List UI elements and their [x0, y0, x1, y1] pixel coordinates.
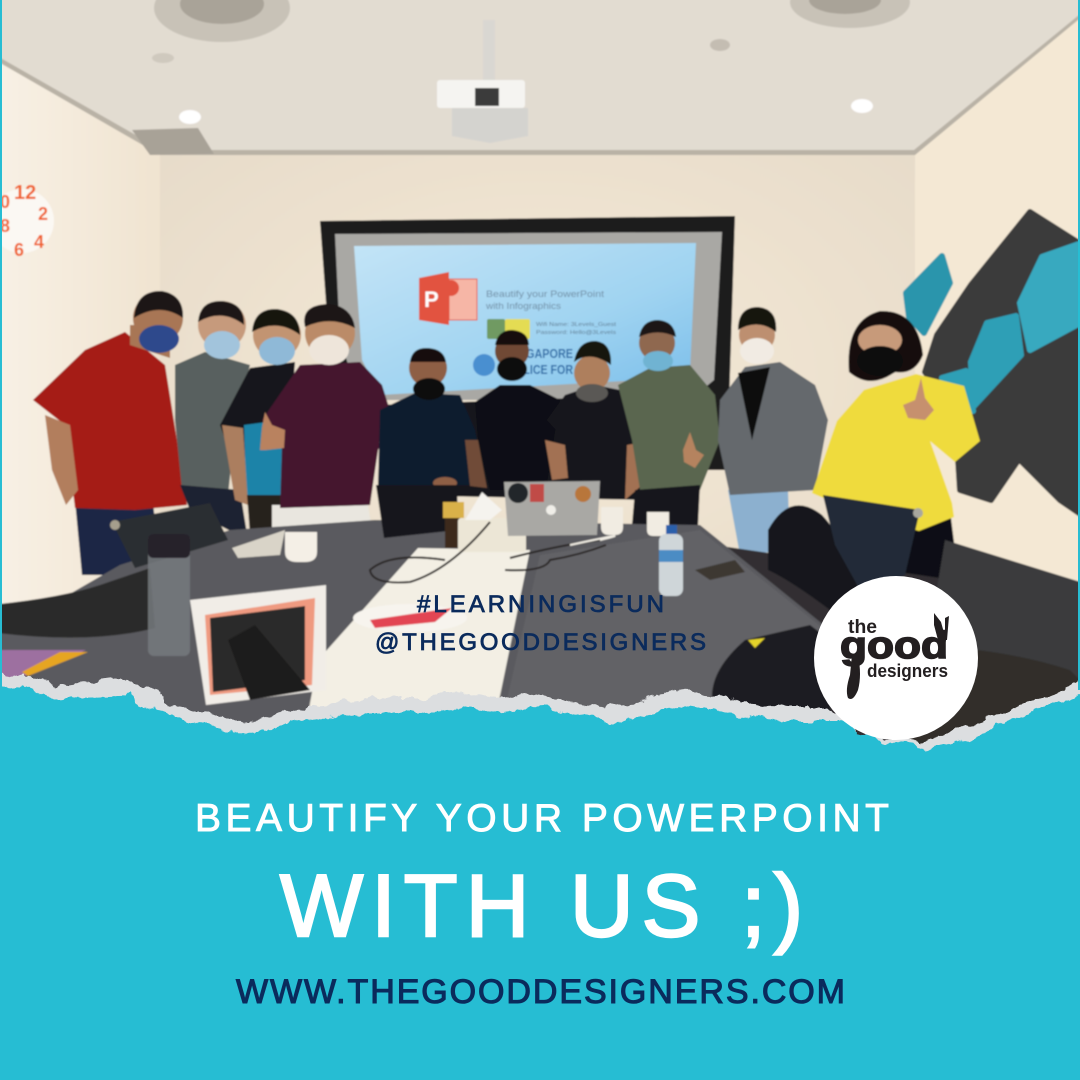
ceiling [0, 0, 1080, 160]
tissue box [458, 492, 526, 552]
left chair [110, 503, 228, 568]
logo badge: the good designers: the [848, 617, 877, 638]
phone pouch [695, 560, 745, 580]
backpack [768, 505, 860, 610]
bag at right front [900, 645, 1080, 760]
left wall [0, 57, 160, 660]
projection screen: Password: Hello@3Levels [536, 330, 616, 336]
person: black polo leaning [545, 341, 654, 500]
logo badge: the good designers: designers [867, 661, 948, 681]
wall clock: 8 [0, 216, 10, 236]
black laptop [376, 485, 458, 538]
projection screen: Wifi Name: 3Levels_Guest [536, 322, 617, 328]
person: navy shirt [378, 348, 483, 489]
navy chair [823, 495, 920, 590]
black bag at table front [712, 625, 830, 750]
right edge strip [1078, 0, 1080, 690]
person: grey hoodie [718, 307, 828, 555]
hashtag caption: #LEARNINGISFUN [417, 591, 664, 618]
back wall [160, 155, 915, 640]
photo frame back [190, 585, 326, 705]
wall clock: 12 [14, 182, 36, 204]
wall clock: 4 [34, 232, 44, 252]
cables on table [370, 522, 615, 582]
plastic bottle [659, 525, 683, 596]
heading line one: BEAUTIFY YOUR POWERPOINT [195, 797, 889, 840]
heading line two: WITH US ;) [280, 856, 803, 955]
person: olive shirt [618, 320, 720, 525]
projection screen [320, 216, 735, 470]
wall clock [0, 182, 54, 260]
pencil holder [443, 502, 464, 548]
handle caption: @THEGOODDESIGNERS [375, 629, 706, 656]
person: red shirt [33, 291, 187, 575]
projection screen: POLICE FOR [508, 362, 573, 377]
PowerPoint logo on slide [419, 272, 477, 325]
wall clock: 0 [0, 192, 10, 212]
left laptop and white cup [232, 530, 317, 562]
clear water bottle [148, 534, 190, 656]
projector [437, 20, 528, 143]
logo badge: the good designers [814, 576, 978, 740]
wall clock: 2 [38, 204, 48, 224]
mugs [601, 507, 669, 536]
conference table [0, 520, 830, 730]
person: black t-shirt [465, 330, 560, 490]
projection screen: with Infographics [485, 301, 561, 312]
projection screen: Beautify your PowerPoint [486, 289, 604, 300]
person: maroon polo, thumbs up [260, 304, 403, 532]
person: grey polo [175, 301, 250, 540]
floor shadow under table [0, 540, 1080, 760]
torn paper edge, grey-white [0, 666, 1080, 780]
photo: training group in meeting room [0, 0, 1080, 760]
plate with red sachet [353, 604, 467, 632]
purple mat [0, 650, 86, 680]
acoustic wall panels [906, 212, 1080, 515]
teal bottom panel with headline text [0, 682, 1080, 1080]
black bag at left [0, 568, 155, 638]
right chair [935, 540, 1080, 700]
projection screen: SINGAPORE [508, 346, 573, 361]
person: yellow shirt, thumbs up [812, 311, 980, 590]
website url: WWW.THEGOODDESIGNERS.COM [236, 973, 845, 1011]
logo badge: the good designers: good [840, 625, 948, 667]
wall clock: 6 [14, 240, 24, 260]
ceiling vents and lights [132, 0, 910, 155]
right wall [915, 10, 1080, 660]
silver laptop [504, 481, 600, 536]
PowerPoint logo on slide: P [424, 287, 439, 312]
left edge strip [0, 0, 2, 690]
crowd shadow behind presenters [378, 395, 660, 500]
person: black and teal shirt [220, 309, 301, 540]
